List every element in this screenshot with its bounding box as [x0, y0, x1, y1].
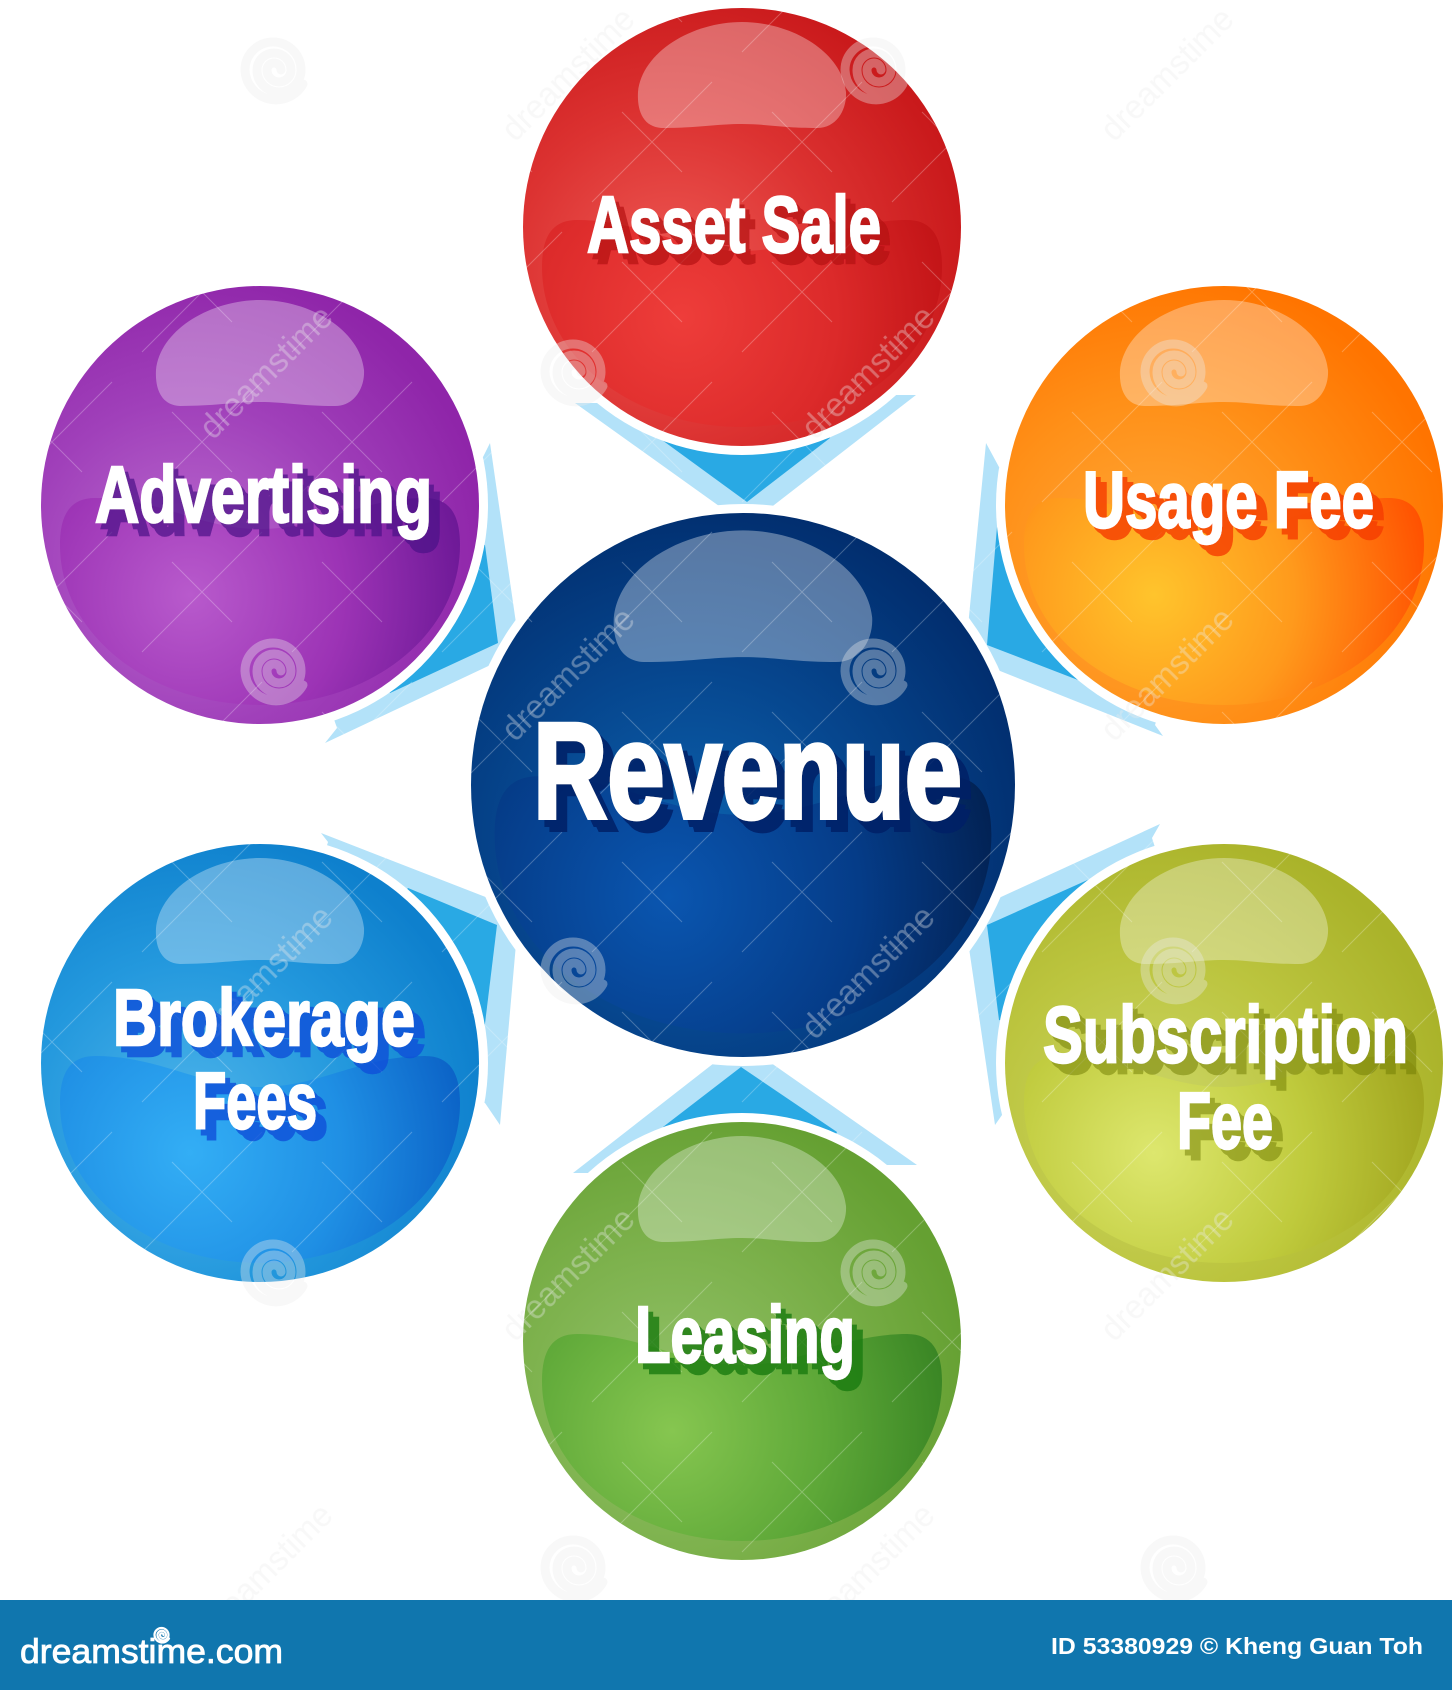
label: Revenue: Revenue [533, 695, 962, 848]
sphere: Revenue (centre) [471, 513, 1015, 1057]
label: Advertising: Advertising [95, 450, 432, 539]
watermark text: dreamstime [1093, 600, 1241, 748]
watermark text [192, 0, 1241, 1644]
watermark spirals [245, 42, 1203, 1598]
label: Fees: Fees [193, 1056, 317, 1145]
watermark text: dreamstime [192, 898, 340, 1046]
arrow: Advertising to Revenue [260, 443, 520, 743]
sphere: Leasing [523, 1122, 961, 1560]
arrow: Leasing to Revenue [573, 1042, 917, 1340]
watermark text: dreamstime [794, 898, 942, 1046]
watermark text: dreamstime [1093, 1200, 1241, 1348]
watermark text: dreamstime [494, 1200, 642, 1348]
arrow: Brokerage Fees to Revenue [260, 833, 519, 1125]
watermark text: dreamstime [494, 0, 642, 148]
footer band [0, 1600, 1452, 1690]
watermark text: dreamstime [794, 1496, 942, 1644]
footer credit: ID 53380929 © Kheng Guan Toh [1051, 1633, 1423, 1659]
sphere: Asset Sale [523, 8, 961, 446]
watermark text: dreamstime [494, 600, 642, 748]
arrow: Usage Fee to Revenue [965, 443, 1224, 736]
label: Asset Sale: Asset Sale [587, 180, 881, 269]
sphere: Subscription Fee [1005, 844, 1443, 1282]
connectors: chevrons pointing to Revenue [260, 300, 1224, 1340]
sphere: Brokerage Fees [41, 844, 479, 1282]
sphere: Advertising [41, 286, 479, 724]
label: Fee: Fee [1177, 1076, 1273, 1165]
watermark text: dreamstime [1093, 0, 1241, 148]
sphere: Usage Fee [1005, 286, 1443, 724]
label: Brokerage: Brokerage [113, 973, 415, 1062]
arrow: Asset Sale to Revenue [575, 300, 916, 526]
footer logo: dreamstime.com [20, 1633, 283, 1671]
arrow: Subscription Fee to Revenue [964, 824, 1224, 1125]
watermark text: dreamstime [192, 1496, 340, 1644]
watermark text: dreamstime [794, 298, 942, 446]
label: Leasing: Leasing [635, 1290, 855, 1379]
watermark text: dreamstime [192, 298, 340, 446]
